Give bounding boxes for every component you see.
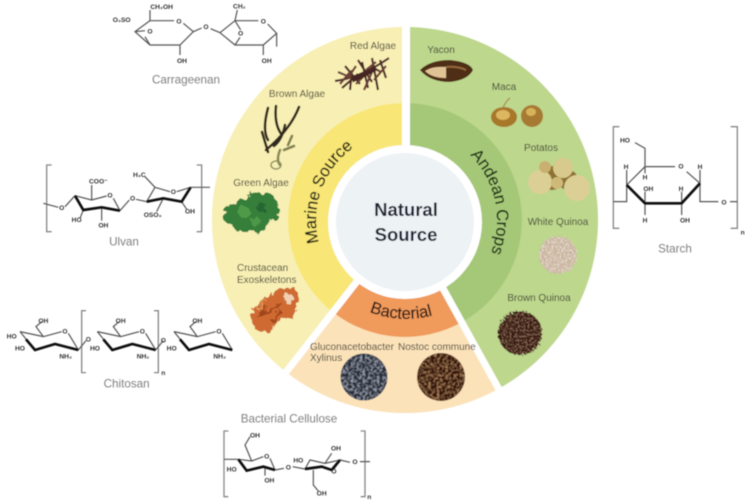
icon: maca [491,98,543,127]
center circle [328,145,482,299]
molecule: carrageenan: O [203,24,209,31]
molecule: chitosan: NH₂ [59,353,72,360]
molecule: chitosan: O [62,328,68,335]
label: red algae: Red Algae [350,41,397,52]
icon: potatoes [528,158,590,201]
panel: andean crops outer band [405,27,598,389]
molecule: starch: OH [680,217,690,224]
molecule: starch: O [678,164,684,171]
label: yacon: Yacon [427,45,455,56]
molecule: chitosan: HO [90,345,100,352]
molecule: chitosan: OH [192,318,202,325]
icon: nostoc commune sample [417,353,465,401]
molecule: carrageenan: CH₂OH [150,4,173,11]
wheel diagram [211,26,599,414]
molecule: chitosan: NH₂ [213,353,226,360]
molecule: carrageenan: O [176,18,182,25]
icon: green algae [224,192,279,232]
molecule: starch: H [624,164,629,171]
molecule: ulvan: O [130,196,135,203]
label: brown quinoa: Brown Quinoa [507,293,571,304]
molecule: starch: H [679,186,684,193]
molecule: carrageenan: O [147,29,153,36]
molecule: ulvan: COO⁻ [89,179,108,186]
label: crustacean exoskeletons [237,263,296,286]
icon: white quinoa [539,236,577,274]
molecule: bacterial cellulose: O [331,468,337,475]
icon: brown quinoa [498,311,542,355]
molecule: carrageenan: O [238,31,243,38]
molecule: chitosan [7,311,232,391]
molecule: chitosan: Chitosan [104,378,150,391]
molecule: carrageenan: O₃SO [113,17,131,24]
molecule: starch [613,127,745,255]
molecule: bacterial cellulose: OH [250,432,260,439]
molecule: chitosan: HO [15,345,25,352]
molecule: chitosan: O [161,337,166,344]
molecule: bacterial cellulose: O [352,459,358,466]
molecule: bacterial cellulose: HO [227,466,237,473]
label: gluconacetobacter xylinus: Gluconacetobacter [310,342,395,353]
molecule: chitosan: n [161,370,165,377]
label: maca: Maca [492,82,517,93]
molecule: ulvan: OSO₃ [144,212,162,219]
molecule: starch: H [698,164,703,171]
molecule: ulvan: OH [185,209,195,216]
molecule: bacterial cellulose: HO [293,457,303,464]
label: gluconacetobacter xylinus [310,342,395,364]
panel: marine source inner band [288,103,405,312]
molecule: carrageenan: O [261,18,266,25]
molecule: starch: Starch [658,242,692,255]
molecule: ulvan: OH [98,222,109,229]
molecule: bacterial cellulose: O [286,465,291,472]
label: crustacean exoskeletons: Crustacean [237,263,288,274]
molecule: starch: O [721,199,727,206]
panel: marine source outer band [212,27,405,372]
molecule: ulvan [43,165,210,248]
molecule: bacterial cellulose: OH [331,446,341,453]
molecule: bacterial cellulose [224,413,371,500]
molecule: chitosan: O [86,337,91,344]
molecule: starch: H [643,175,648,182]
panel: andean crops inner band [405,103,522,322]
panel: bacterial outer band [286,220,499,413]
label: gluconacetobacter xylinus: Xylinus [310,353,342,364]
icon: brown algae [262,106,299,169]
molecule: bacterial cellulose: O [264,454,269,461]
molecule: ulvan: HO [72,217,82,224]
molecule: bacterial cellulose: OH [264,477,275,484]
molecule: ulvan: O [59,205,64,212]
molecule: bacterial cellulose: OH [317,491,327,498]
heading: bacterial: Bacterial [370,301,432,320]
molecule: ulvan: Ulvan [109,235,139,248]
label: brown algae: Brown Algae [269,89,326,100]
molecule: ulvan: H₃C [133,172,146,179]
heading: andean crops: Andean Crops [470,150,510,255]
molecule: ulvan: O [171,189,176,196]
molecule: starch: HO [620,137,630,144]
label: white quinoa: White Quinoa [528,217,589,228]
molecule: carrageenan: OH [177,58,187,65]
molecule: chitosan: HO [167,345,177,352]
label: crustacean exoskeletons: Exoskeletons [237,275,296,286]
molecule: carrageenan: Carrageenan [152,73,220,86]
molecule: starch: H [643,217,648,224]
icon: crustacean [250,286,300,332]
molecule: starch: n [741,229,745,236]
heading: marine source: Marine Source [304,142,352,244]
panel: bacterial inner band [333,220,462,337]
molecule: bacterial cellulose: Bacterial Cellulose [241,413,337,426]
center circle: Natural [374,199,438,220]
icon: yacon [420,60,473,82]
molecule: chitosan: OH [38,318,49,325]
molecule: carrageenan: CH₂ [233,3,246,10]
molecule: chitosan: HO [7,333,17,340]
icon: red algae [335,58,389,90]
molecule: chitosan: NH₂ [137,353,149,360]
center circle: Source [375,224,437,245]
molecule: carrageenan [113,3,277,86]
molecule: chitosan: OH [116,318,126,325]
molecule: chitosan: O [216,328,222,335]
molecule: chitosan: O [140,328,145,335]
icon: gluconacetobacter sample [340,354,388,400]
label: potatos: Potatos [524,143,558,154]
label: nostoc commune: Nostoc commune [398,342,476,353]
molecule: starch: OH [643,186,654,193]
molecule: ulvan: O [107,192,113,199]
molecule: carrageenan: OH [262,58,272,65]
label: green algae: Green Algae [233,178,289,189]
